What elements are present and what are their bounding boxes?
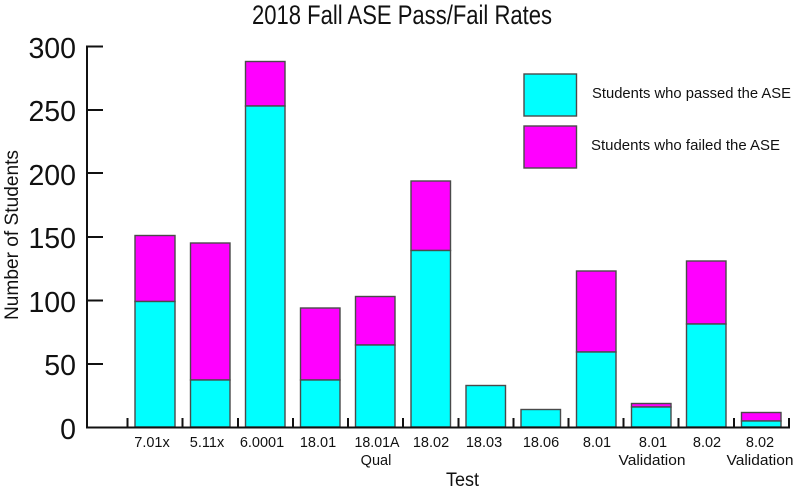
title: 2018 Fall ASE Pass/Fail Rates bbox=[252, 0, 552, 30]
axes and tick marks bbox=[87, 46, 790, 428]
x axis labels: 8.01 bbox=[583, 435, 611, 451]
x axis labels: 8.02 bbox=[693, 435, 721, 451]
bar: 6.0001 bbox=[246, 62, 285, 427]
legend bbox=[524, 74, 791, 168]
x axis labels: 8.01 bbox=[639, 435, 667, 451]
x axis labels bbox=[134, 435, 794, 469]
bar: 18.06 bbox=[521, 410, 560, 427]
bar: 5.11x bbox=[190, 243, 230, 427]
legend label: passed: Students who passed the ASE bbox=[592, 85, 791, 102]
bar: 18.02 bbox=[411, 181, 450, 427]
legend swatch: failed bbox=[524, 126, 576, 168]
bar: 7.01x bbox=[135, 236, 175, 427]
x axis labels: Validation bbox=[618, 453, 686, 469]
legend label: failed: Students who failed the ASE bbox=[591, 137, 780, 154]
x axis labels: 6.0001 bbox=[240, 435, 284, 451]
y axis labels bbox=[28, 33, 76, 446]
y axis title: Number of Students bbox=[2, 150, 23, 320]
y axis labels: 100 bbox=[28, 287, 76, 319]
y axis labels: 300 bbox=[28, 33, 76, 65]
bar: 18.01 bbox=[300, 308, 340, 427]
bar: 18.03 bbox=[466, 386, 506, 427]
y axis labels: 50 bbox=[44, 350, 76, 382]
x axis labels: 18.01A bbox=[354, 435, 400, 451]
x axis labels: 18.01 bbox=[300, 435, 336, 451]
x axis title: Test bbox=[446, 470, 480, 491]
y axis labels: 0 bbox=[60, 414, 76, 446]
x axis labels: 18.03 bbox=[466, 435, 502, 451]
x axis labels: 5.11x bbox=[190, 435, 225, 451]
x axis labels: 18.06 bbox=[523, 435, 559, 451]
y axis labels: 200 bbox=[28, 160, 76, 192]
x axis labels: 8.02 bbox=[746, 435, 774, 451]
bar: 8.01 Validation bbox=[632, 404, 671, 427]
x axis labels: Validation bbox=[726, 453, 794, 469]
x axis labels: 18.02 bbox=[413, 435, 449, 451]
y axis labels: 250 bbox=[28, 96, 76, 128]
x axis labels: 7.01x bbox=[134, 435, 170, 451]
x axis labels: Qual bbox=[361, 453, 391, 469]
bar: 8.02 bbox=[686, 261, 726, 427]
legend swatch: passed bbox=[524, 74, 576, 116]
bar: 8.02 Validation bbox=[742, 412, 781, 427]
bar: 8.01 bbox=[576, 271, 616, 427]
y axis labels: 150 bbox=[28, 223, 76, 255]
bar: 18.01A Qual bbox=[356, 296, 395, 427]
